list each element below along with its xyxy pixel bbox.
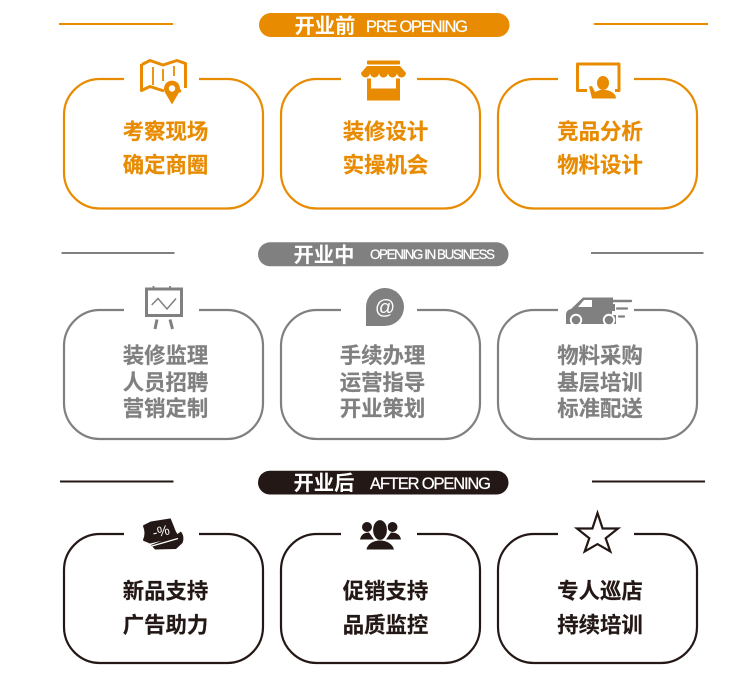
- panel: competitor analysis: [498, 64, 697, 208]
- icon: presenter at screen: [578, 64, 619, 98]
- text: new product support: 新品支持: [123, 580, 208, 604]
- text: renovation design: 装修设计: [343, 120, 428, 144]
- panel: new product support: [64, 520, 263, 663]
- text: survey site: 考察现场: [123, 120, 208, 144]
- panel: renovation supervision: [64, 286, 263, 439]
- text: renovation supervision: 装修监理: [123, 344, 208, 368]
- icon: at-sign bubble: @: [375, 297, 395, 319]
- heading: pre opening: 开业前: [294, 15, 355, 38]
- panel: store visits: [498, 513, 697, 663]
- text: store visits: 持续培训: [557, 614, 643, 638]
- panel: promotion support: [281, 520, 480, 663]
- text: material purchasing: 基层培训: [557, 371, 643, 395]
- panel: survey site: [64, 60, 263, 208]
- text: new product support: 广告助力: [123, 614, 208, 638]
- text: procedures: 开业策划: [340, 397, 425, 421]
- panel: material purchasing: [498, 298, 697, 439]
- text: promotion support: 促销支持: [343, 580, 428, 604]
- panel: procedures: [281, 288, 480, 439]
- icon: star: [577, 513, 618, 552]
- text: survey site: 确定商圈: [123, 152, 208, 178]
- icon: map with pin: [142, 60, 186, 104]
- icon: discount tickets: [144, 520, 183, 550]
- heading: pre opening: [259, 13, 510, 38]
- text: renovation design: 实操机会: [343, 152, 428, 178]
- heading: after opening: AFTER OPENING: [370, 475, 491, 493]
- heading: opening in business: 开业中: [294, 244, 354, 267]
- heading: pre opening: PRE OPENING: [366, 18, 468, 36]
- heading: opening in business: OPENING IN BUSINESS: [370, 247, 495, 262]
- icon: group of people: [360, 520, 401, 550]
- text: competitor analysis: 物料设计: [557, 154, 643, 178]
- panel: renovation design: [281, 60, 480, 208]
- text: promotion support: 品质监控: [343, 614, 428, 638]
- text: material purchasing: 物料采购: [557, 344, 643, 368]
- icon: delivery van: [566, 298, 631, 326]
- text: store visits: 专人巡店: [557, 580, 643, 604]
- text: procedures: 手续办理: [340, 344, 425, 368]
- icon: discount tickets: -%: [151, 521, 171, 541]
- heading: after opening: 开业后: [294, 472, 354, 495]
- icon: at-sign bubble: [366, 288, 404, 326]
- icon: chart board: [146, 286, 182, 329]
- text: material purchasing: 标准配送: [557, 397, 643, 421]
- heading: opening in business: [258, 242, 508, 267]
- heading: after opening: [258, 471, 508, 495]
- text: renovation supervision: 人员招聘: [123, 371, 208, 395]
- text: renovation supervision: 营销定制: [123, 396, 208, 421]
- icon: storefront: [361, 60, 406, 100]
- text: competitor analysis: 竞品分析: [557, 120, 643, 144]
- text: procedures: 运营指导: [340, 371, 425, 395]
